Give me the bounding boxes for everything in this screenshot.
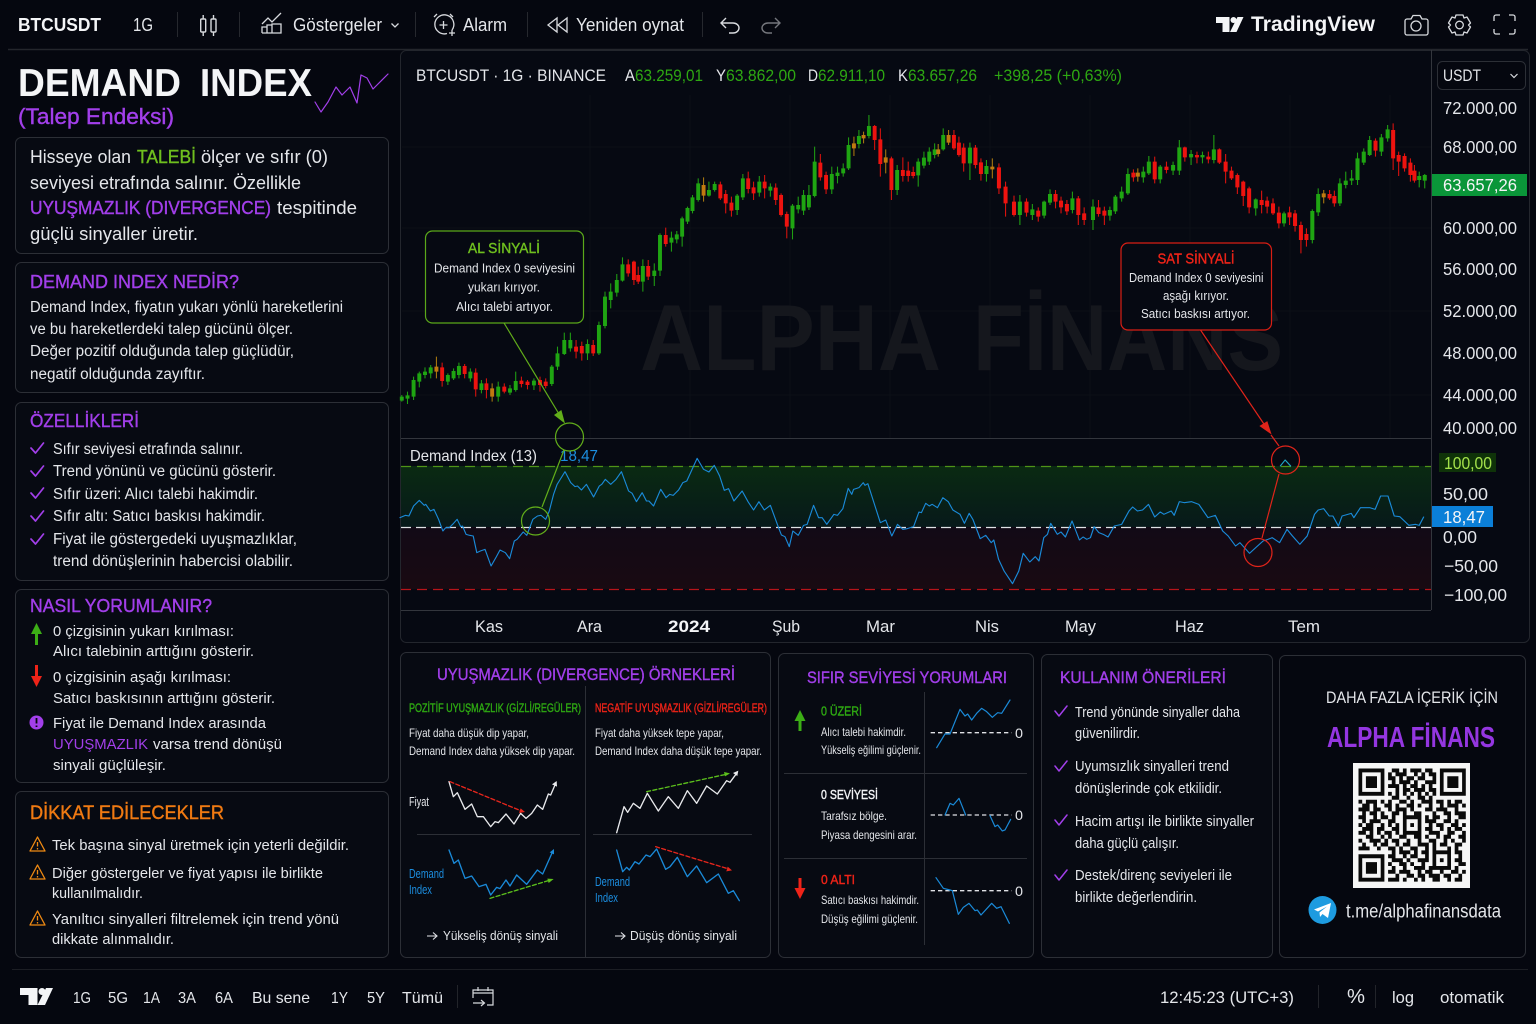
icon: purple exclamation: [30, 716, 44, 730]
green zone: [401, 466, 1431, 527]
negative divergence text: NEGATİF UYUŞMAZLIK (GİZLİ/REGÜLER): [595, 701, 767, 715]
indicator: demand index: [400, 448, 1431, 590]
body text: negatif olduğunda zayıftır.: [30, 366, 205, 383]
TradingView wordmark: TradingView: [1251, 13, 1376, 36]
icon: candles: [201, 15, 216, 36]
range buttons: 3A: [178, 990, 196, 1007]
demand index line: [400, 458, 1424, 584]
chart header: 63.657,26: [908, 66, 977, 85]
heading: ÖZELLİKLERİ: [30, 410, 139, 431]
upward break text: [53, 623, 254, 660]
icon: undo: [721, 18, 739, 33]
row: below zero: [794, 872, 919, 926]
chart header: [416, 66, 1122, 85]
heading: DİKKAT EDİLECEKLER: [30, 803, 224, 824]
price axis: 56.000,00: [1443, 259, 1517, 279]
intro text: güçlü sinyaller üretir.: [30, 223, 198, 244]
top toolbar: [0, 0, 1536, 50]
divergence note: [53, 715, 282, 774]
heading: NASIL YORUMLANIR?: [30, 595, 212, 616]
caution list: Diğer göstergeler ve fiyat yapısı ile birlikte: [52, 865, 323, 882]
icon: telegram: [1308, 896, 1336, 924]
time axis: May: [1065, 617, 1096, 636]
title: [18, 62, 312, 105]
time axis: Tem: [1288, 617, 1320, 636]
row: below zero: Düşüş eğilimi güçlenir.: [821, 912, 918, 926]
chart header: 63.259,01: [635, 66, 703, 85]
TradingView logo: [1216, 17, 1244, 32]
watermark: [640, 285, 1283, 390]
price axis: 60.000,00: [1443, 218, 1517, 238]
axis labels: Demand: [409, 867, 444, 881]
title: DEMAND: [18, 62, 181, 105]
TradingView logo: [20, 988, 53, 1005]
symbol name: BTCUSDT: [18, 15, 101, 35]
callout: sell signal: aşağı kırıyor.: [1163, 289, 1229, 303]
price axis: 40.000,00: [1443, 418, 1517, 438]
mini zero charts: [931, 700, 1012, 923]
feature list: Fiyat ile göstergedeki uyuşmazlıklar,: [53, 531, 297, 548]
brand name: ALPHA FİNANS: [1327, 722, 1495, 754]
indicator axis: 50,00: [1443, 484, 1488, 504]
panel: call to action: [1280, 656, 1526, 958]
scale buttons: otomatik: [1440, 988, 1504, 1007]
intro text: [30, 146, 357, 244]
caution list: kullanılmalıdır.: [52, 885, 143, 902]
title block: [18, 62, 388, 129]
row: zero level: [821, 787, 917, 842]
time axis: 2024: [668, 617, 711, 636]
replay label: Yeniden oynat: [576, 15, 684, 35]
caution list: Tek başına sinyal üretmek için yeterli değildir.: [52, 837, 349, 854]
panel: how to interpret: [16, 590, 388, 782]
indicator value: 18,47: [560, 448, 598, 465]
axis labels: [409, 795, 630, 905]
panel: main chart: [400, 50, 1530, 642]
chart header: A: [625, 66, 636, 85]
arrow: sell signal: [1200, 330, 1300, 566]
indicator axis: [1432, 453, 1507, 605]
caution list: dikkate alınmalıdır.: [52, 931, 174, 948]
feature list: Sıfır altı: Satıcı baskısı hakimdir.: [53, 508, 265, 525]
indicator axis: −50,00: [1444, 556, 1498, 576]
negative divergence text: [595, 701, 767, 758]
range buttons: 1G: [73, 990, 91, 1007]
range buttons: 5Y: [367, 990, 385, 1007]
feature list: Sıfır üzeri: Alıcı talebi hakimdir.: [53, 486, 258, 503]
icon: camera: [1405, 16, 1428, 35]
price axis: 48.000,00: [1443, 343, 1517, 363]
scale buttons: %: [1347, 986, 1365, 1008]
title: INDEX: [200, 62, 312, 105]
range buttons: 5G: [108, 990, 128, 1007]
callout: sell signal: SAT SİNYALİ: [1158, 250, 1234, 268]
feature list: trend dönüşlerinin habercisi olabilir.: [53, 553, 293, 570]
positive divergence text: Fiyat daha düşük dip yapar,: [409, 726, 529, 740]
indicator axis: 0,00: [1443, 527, 1477, 547]
icon: purple squiggle: [315, 74, 388, 112]
time axis: Kas: [475, 617, 503, 636]
intro text: seviyesi etrafında salınır. Özellikle: [30, 172, 301, 193]
price axis: 68.000,00: [1443, 137, 1517, 157]
axis labels: Index: [595, 891, 619, 905]
watermark: FİNANS: [973, 285, 1283, 390]
time axis: Mar: [866, 617, 895, 636]
signal captions: [427, 928, 737, 943]
icons: warning triangles: [30, 837, 45, 925]
tips list: dönüşlerinde çok etkilidir.: [1075, 781, 1222, 797]
row: zero level: Tarafsız bölge.: [821, 809, 887, 823]
axis labels: Fiyat: [409, 795, 429, 809]
promo text: DAHA FAZLA İÇERİK İÇİN: [1326, 688, 1498, 707]
row: above zero: Alıcı talebi hakimdir.: [821, 725, 906, 739]
upward break text: 0 çizgisinin yukarı kırılması:: [53, 623, 234, 640]
intro text: TALEBİ: [137, 146, 196, 167]
indicator label: Demand Index (13): [410, 448, 537, 465]
tag: current value: 18,47: [1443, 507, 1485, 527]
row: below zero: 0 ALTI: [821, 872, 855, 887]
row: above zero: Yükseliş eğilimi güçlenir.: [821, 743, 921, 757]
panel: zero level: [778, 654, 1034, 958]
divergence note: Fiyat ile Demand Index arasında: [53, 715, 267, 732]
intro text: tespitinde: [277, 197, 357, 218]
interval: 1G: [133, 15, 153, 35]
intro text: ölçer ve sıfır (0): [201, 146, 328, 167]
icons: check marks: [31, 443, 44, 544]
zero labels: 0: [1015, 883, 1023, 899]
negative divergence text: Demand Index daha düşük tepe yapar.: [595, 744, 762, 758]
icon: redo: [762, 18, 780, 33]
current price tag: 63.657,26: [1443, 175, 1517, 195]
callout: sell signal: Demand Index 0 seviyesini: [1129, 271, 1264, 285]
icon: replay: [548, 18, 567, 32]
panel: intro: [16, 138, 388, 254]
body text: [30, 299, 343, 383]
divergence note: UYUŞMAZLIK: [53, 736, 148, 753]
positive divergence text: [409, 701, 581, 758]
signal captions: Yükseliş dönüş sinyali: [443, 928, 558, 943]
intro text: Hisseye olan: [30, 146, 131, 167]
icon: fullscreen: [1494, 15, 1515, 34]
currency selector: [1438, 62, 1526, 90]
row: below zero: Satıcı baskısı hakimdir.: [821, 893, 919, 907]
tips list: daha güçlü çalışır.: [1075, 836, 1179, 852]
row: above zero: [794, 704, 921, 757]
heading: DEMAND INDEX NEDİR?: [30, 271, 239, 292]
caution list: [52, 837, 349, 948]
panel: usage tips: [1042, 654, 1272, 958]
body text: ve bu hareketlerdeki talep gücünü ölçer.: [30, 321, 293, 338]
indicators label: Göstergeler: [293, 15, 382, 35]
feature list: Sıfır seviyesi etrafında salınır.: [53, 441, 243, 458]
QR code: [1353, 763, 1470, 888]
icon: green up arrow: [31, 623, 42, 645]
chart header: 62.911,10: [818, 66, 885, 85]
callout: buy signal: [426, 231, 584, 323]
heading: SIFIR SEVİYESİ YORUMLARI: [807, 668, 1007, 687]
divergence note: varsa trend dönüşü: [153, 736, 282, 753]
currency selector: USDT: [1443, 66, 1481, 85]
scale buttons: log: [1392, 988, 1414, 1007]
range buttons: Tümü: [402, 990, 443, 1007]
icon: calendar: [473, 987, 493, 1006]
zero labels: [1015, 725, 1023, 899]
price axis: 72.000,00: [1443, 98, 1517, 118]
tips list: Destek/direnç seviyeleri ile: [1075, 868, 1232, 884]
tag: current value: [1432, 506, 1493, 527]
axis labels: Demand: [595, 875, 630, 889]
alarm label: Alarm: [463, 15, 507, 35]
upward break text: Alıcı talebinin arttığını gösterir.: [53, 643, 254, 660]
scale buttons: [1347, 986, 1504, 1008]
time axis: Haz: [1175, 617, 1204, 636]
feature list: [53, 441, 297, 570]
panel: divergence examples: [400, 652, 770, 958]
range buttons: Bu sene: [252, 990, 310, 1007]
intro text: UYUŞMAZLIK (DIVERGENCE): [30, 197, 271, 218]
panel: what is demand index: [16, 262, 388, 392]
tips list: güvenilirdir.: [1075, 726, 1140, 742]
watermark: ALPHA: [640, 285, 941, 390]
row: zero level: 0 SEVİYESİ: [821, 787, 878, 802]
row: zero level: Piyasa dengesini arar.: [821, 828, 917, 842]
callout: buy signal: Alıcı talebi artıyor.: [456, 299, 553, 314]
indicator axis: −100,00: [1444, 585, 1507, 605]
axis labels: Index: [409, 883, 433, 897]
chart header: +398,25 (+0,63%): [994, 66, 1122, 85]
tips list: Hacim artışı ile birlikte sinyaller: [1075, 814, 1254, 830]
icon: chevron: [392, 24, 398, 27]
negative divergence text: Fiyat daha yüksek tepe yapar,: [595, 726, 724, 740]
range buttons: 6A: [215, 990, 233, 1007]
callout: buy signal: Demand Index 0 seviyesini: [434, 260, 575, 276]
clock: 12:45:23 (UTC+3): [1160, 988, 1294, 1007]
range buttons: [73, 990, 443, 1007]
candlestick chart: [402, 115, 1425, 404]
callout: buy signal: yukarı kırıyor.: [468, 280, 540, 294]
red zone: [401, 527, 1431, 589]
zero labels: 0: [1015, 725, 1023, 741]
icon: red down arrow: [31, 665, 42, 687]
panel: features: [16, 402, 388, 580]
time axis: Şub: [772, 617, 800, 636]
callout: sell signal: [1121, 243, 1272, 330]
time axis: [475, 617, 1320, 636]
chart header: Y: [716, 66, 726, 85]
caution list: Yanıltıcı sinyalleri filtrelemek için trend yönü: [52, 911, 339, 928]
tips list: [1075, 705, 1254, 906]
downward break text: 0 çizgisinin aşağı kırılması:: [53, 669, 231, 686]
callout: sell signal: Satıcı baskısı artıyor.: [1141, 307, 1250, 321]
positive divergence text: POZİTİF UYUŞMAZLIK (GİZLİ/REGÜLER): [409, 701, 581, 715]
downward break text: Satıcı baskısının arttığını gösterir.: [53, 690, 275, 707]
icons: check marks: [1055, 706, 1067, 880]
level lines: [401, 466, 1431, 590]
tips list: Trend yönünde sinyaller daha: [1075, 705, 1241, 721]
icon: alarm: [434, 14, 455, 36]
time axis: Ara: [577, 617, 603, 636]
tips list: birlikte değerlendirin.: [1075, 890, 1197, 906]
price axis: 44.000,00: [1443, 385, 1517, 405]
price axis: [1443, 98, 1517, 438]
callout: buy signal: AL SİNYALİ: [468, 239, 540, 257]
feature list: Trend yönünü ve gücünü gösterir.: [53, 463, 276, 480]
price axis: 52.000,00: [1443, 301, 1517, 321]
downward break text: [53, 669, 275, 707]
chart header: BTCUSDT · 1G · BINANCE: [416, 66, 606, 85]
tag: 100: 100,00: [1444, 453, 1492, 473]
positive divergence text: Demand Index daha yüksek dip yapar.: [409, 744, 575, 758]
heading: UYUŞMAZLIK (DIVERGENCE) ÖRNEKLERİ: [437, 665, 735, 684]
chart header: D: [808, 66, 818, 85]
row: above zero: 0 ÜZERİ: [821, 704, 862, 718]
mini charts: [449, 771, 739, 901]
telegram handle: t.me/alphafinansdata: [1346, 902, 1501, 922]
time axis: Nis: [975, 617, 999, 636]
body text: Demand Index, fiyatın yukarı yönlü hareketlerini: [30, 299, 343, 316]
chart header: K: [898, 66, 909, 85]
chart header: 63.862,00: [726, 66, 796, 85]
body text: Değer pozitif olduğunda talep güçlüdür,: [30, 343, 294, 360]
signal captions: Düşüş dönüş sinyali: [630, 928, 737, 943]
panel: cautions: [16, 792, 388, 958]
icon: settings: [1448, 15, 1470, 35]
zero labels: 0: [1015, 807, 1023, 823]
divergence note: sinyali güçlüleşir.: [53, 757, 166, 774]
bottom toolbar: [12, 970, 1528, 1008]
range buttons: 1A: [143, 990, 160, 1007]
range buttons: 1Y: [331, 990, 348, 1007]
arrow: buy signal: [504, 323, 584, 535]
subtitle: (Talep Endeksi): [18, 104, 174, 129]
icon: indicators: [262, 13, 281, 33]
heading: KULLANIM ÖNERİLERİ: [1060, 668, 1226, 687]
tips list: Uyumsızlık sinyalleri trend: [1075, 759, 1229, 775]
